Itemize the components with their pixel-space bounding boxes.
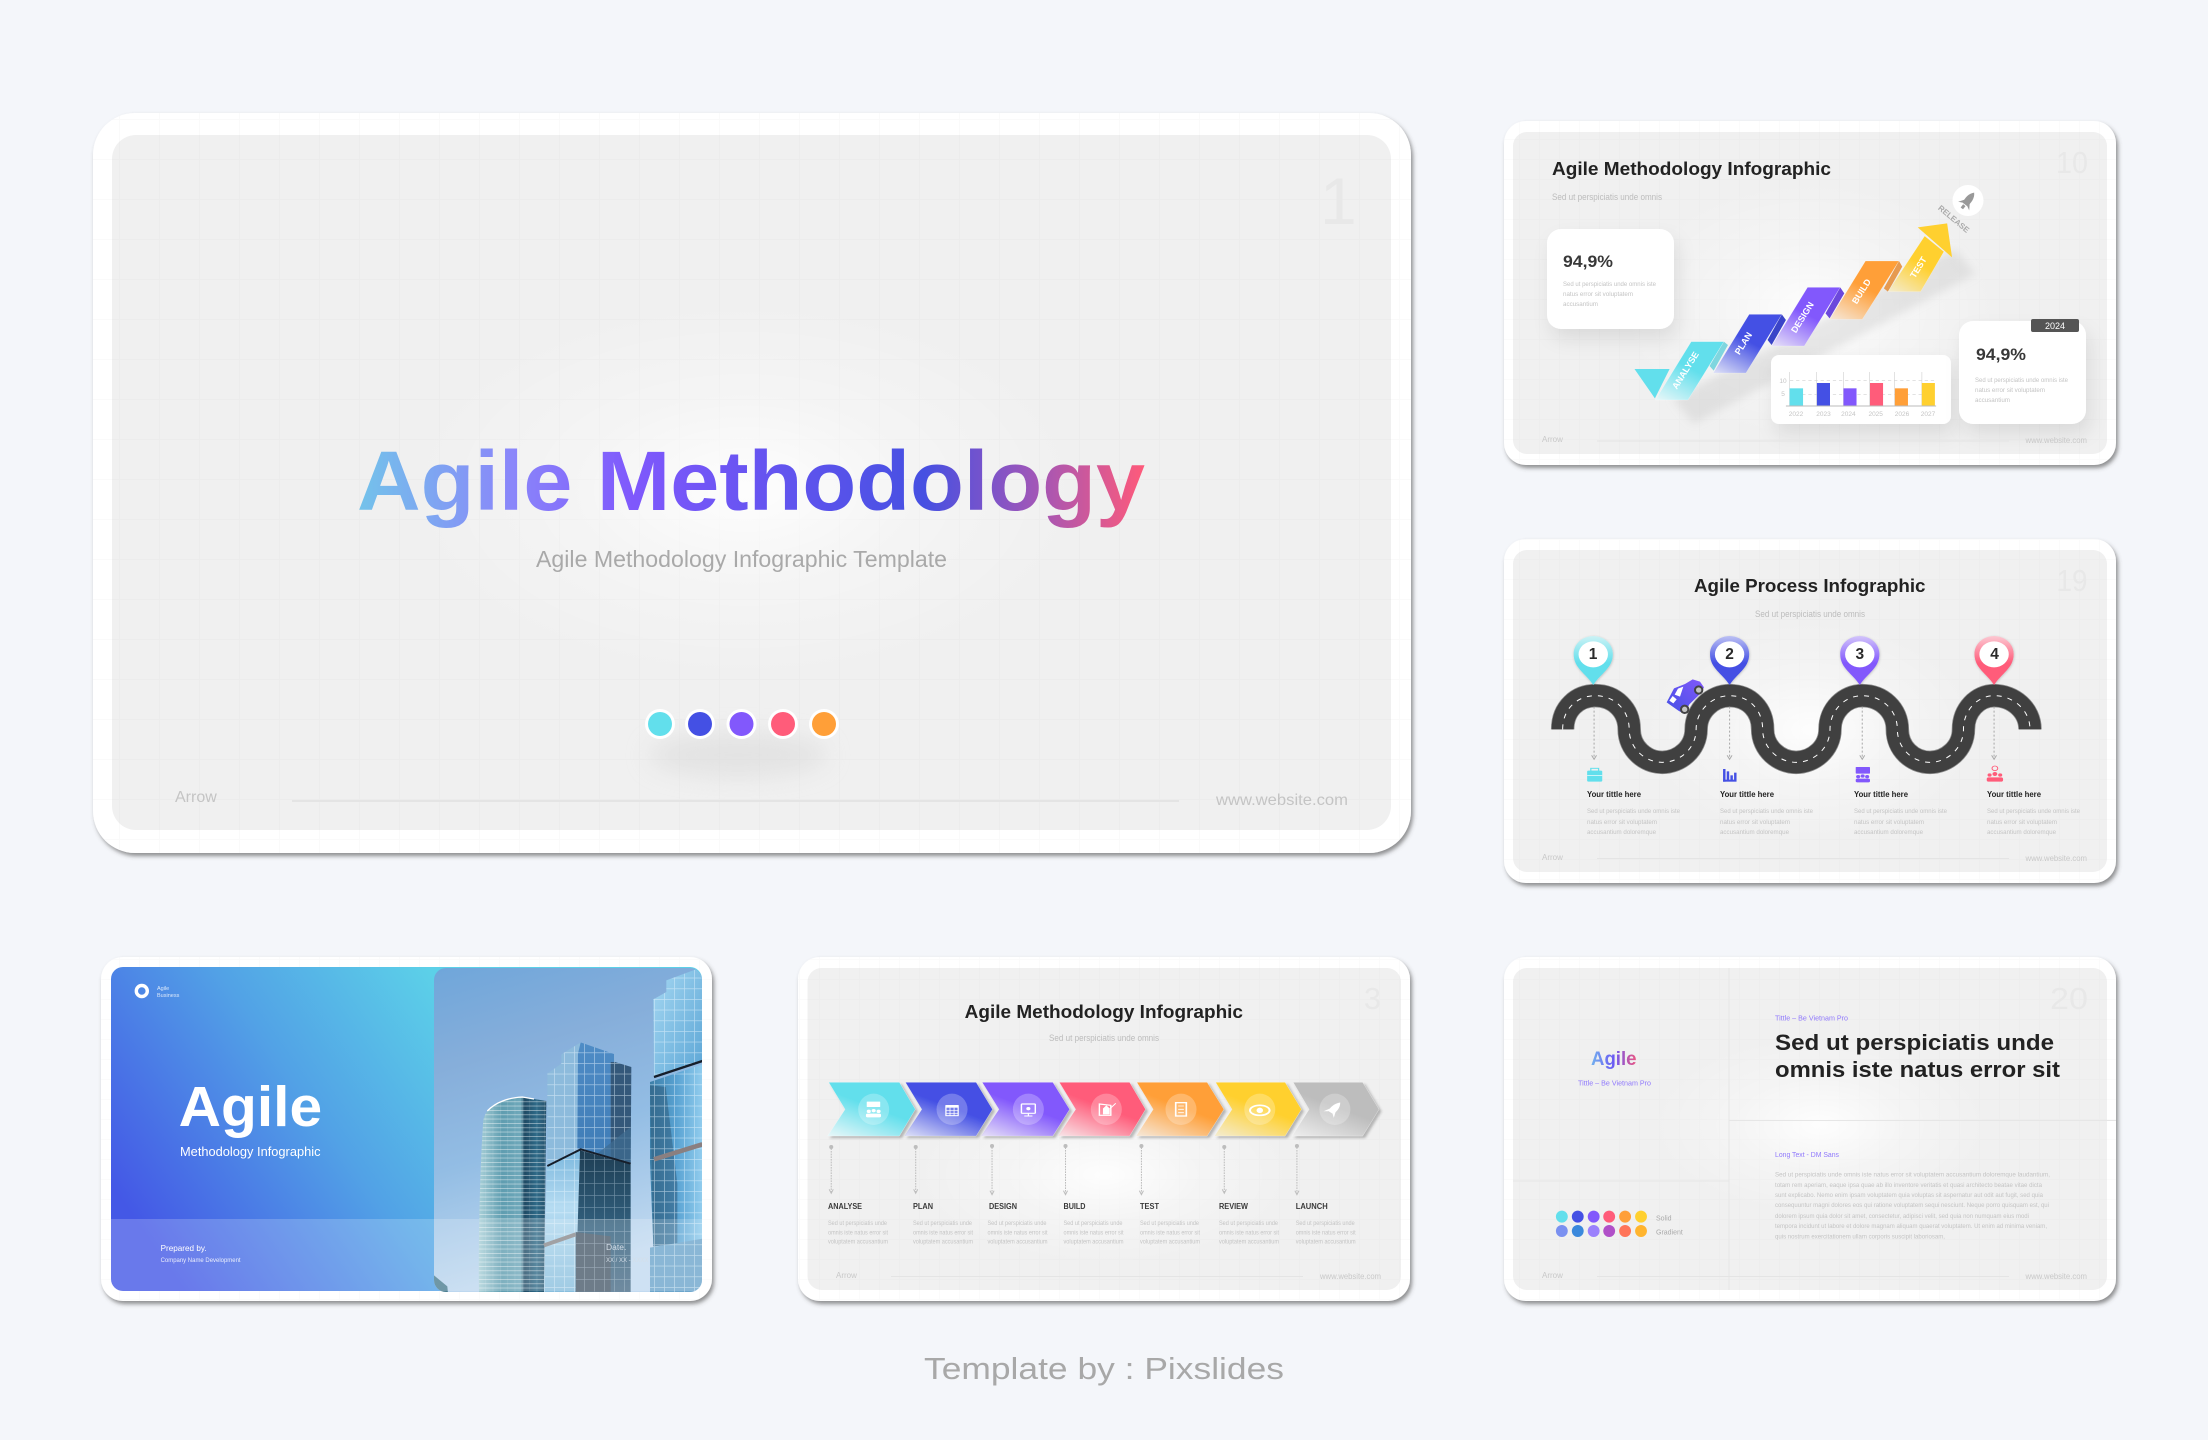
stat card left: 94,9% [1563, 253, 1613, 271]
heading [1775, 1030, 2061, 1082]
icon: car [1667, 679, 1704, 714]
step 3 text: accusantium doloremque [1854, 829, 1923, 836]
paragraph: Sed ut perspiciatis unde omnis iste natus error sit voluptatem accusantium doloremque laudantium, [1775, 1171, 2050, 1178]
step 1 text: natus error sit voluptatem [1587, 819, 1657, 826]
step 1 text: Sed ut perspiciatis unde omnis iste [1587, 808, 1680, 815]
colour dots [645, 709, 839, 777]
bar chart: 2022 [1789, 411, 1804, 418]
year badge: 2024 [2045, 321, 2065, 331]
step: design [988, 1202, 1048, 1246]
panel: main title slide [93, 113, 1411, 853]
pin numbers [1589, 646, 1999, 663]
chevron: launch [1292, 1082, 1379, 1136]
palette swatches: Gradient [1656, 1230, 1683, 1237]
tower: centre [544, 1042, 631, 1294]
tower: right [650, 967, 702, 1294]
paragraph: sunt explicabo. Nemo enim ipsam voluptatem quia voluptas sit aspernatur aut odit aut fugit, sed quia [1775, 1192, 2043, 1199]
road [1563, 696, 2030, 762]
chevron: test [1136, 1082, 1224, 1136]
step 4 text: accusantium doloremque [1987, 829, 2056, 836]
segment: build [1830, 261, 1902, 319]
step: build: voluptatem accusantium [1064, 1240, 1124, 1246]
ribbon labels: ANALYSE [1670, 350, 1701, 391]
bar chart: 2025 [1868, 411, 1883, 418]
pointer arrows [829, 1144, 1299, 1195]
stat card left: Sed ut perspiciatis unde omnis iste [1563, 281, 1656, 288]
step 3 text [1854, 789, 1947, 836]
step icons [1587, 766, 2003, 782]
bar chart: 2026 [1895, 411, 1910, 418]
palette swatches [1556, 1211, 1683, 1237]
palette swatches: Solid [1656, 1216, 1672, 1223]
step: review: omnis iste natus error sit [1219, 1231, 1279, 1237]
pin numbers: 4 [1990, 646, 1999, 663]
step 1 text [1587, 789, 1680, 836]
panel: slide 3 chevron process [798, 957, 1410, 1301]
panel: slide 10 staircase arrow [1504, 121, 2116, 465]
date: XX / XX - XXXX [606, 1258, 648, 1264]
subheading: Sed ut perspiciatis unde omnis [1049, 1033, 1159, 1043]
chevron: analyse [828, 1082, 915, 1136]
brand word: Agile [1591, 1049, 1636, 1070]
credit line: Template by : Pixslides [924, 1351, 1284, 1386]
step: launch: Sed ut perspiciatis unde [1296, 1221, 1355, 1227]
logo: Business [157, 993, 180, 999]
stat card right [1959, 319, 2086, 424]
step: design: Sed ut perspiciatis unde [988, 1221, 1047, 1227]
step: analyse: ANALYSE [828, 1202, 863, 1211]
step 4 text: Sed ut perspiciatis unde omnis iste [1987, 808, 2080, 815]
step: test: voluptatem accusantium [1140, 1240, 1200, 1246]
step 4 text [1987, 789, 2080, 836]
photo: glass towers [434, 967, 702, 1294]
paragraph: quis nostrum exercitationem ullam corporis suscipit laboriosam, [1775, 1234, 1945, 1241]
tower: round [479, 1097, 546, 1294]
ribbon labels: BUILD [1850, 277, 1873, 306]
step: test: Sed ut perspiciatis unde [1140, 1221, 1200, 1227]
step: build: Sed ut perspiciatis unde [1064, 1221, 1123, 1227]
bottom band [111, 1219, 702, 1291]
ribbon labels [1670, 255, 1929, 391]
footer: Arrow [175, 789, 217, 806]
icon: bar report [1723, 769, 1737, 782]
paragraph: consequuntur magni dolores eos qui ratione voluptatem sequi nesciunt. Neque porro quisquam est, qui [1775, 1202, 2049, 1209]
step: review: Sed ut perspiciatis unde [1219, 1221, 1279, 1227]
segment: design [1772, 287, 1844, 346]
step: plan: Sed ut perspiciatis unde [913, 1221, 973, 1227]
brand word: Tittle – Be Vietnam Pro [1578, 1081, 1651, 1088]
step: plan: voluptatem accusantium [913, 1240, 973, 1246]
slide number: 3 [1364, 981, 1381, 1016]
ribbon labels: TEST [1908, 255, 1929, 280]
step: design: voluptatem accusantium [988, 1240, 1048, 1246]
step 2 text: natus error sit voluptatem [1720, 819, 1790, 826]
release label: RELEASE [1936, 203, 1971, 235]
stat card left [1547, 229, 1674, 329]
step: design: omnis iste natus error sit [988, 1231, 1048, 1237]
icon: briefcase [1587, 768, 1602, 782]
slide number: 1 [1320, 164, 1357, 238]
panel: cover slide [101, 957, 712, 1301]
step: analyse: voluptatem accusantium [828, 1240, 888, 1246]
segment: test arrow [1888, 223, 1952, 292]
footer [836, 1271, 1381, 1281]
step: review: voluptatem accusantium [1219, 1240, 1279, 1246]
bar chart: 5 [1781, 391, 1785, 398]
step: design: DESIGN [989, 1202, 1017, 1211]
prepared by: Prepared by. [161, 1243, 207, 1253]
step 1 text: accusantium doloremque [1587, 829, 1656, 836]
step: review: REVIEW [1219, 1202, 1248, 1211]
step: analyse: Sed ut perspiciatis unde [828, 1221, 888, 1227]
chevron: design [981, 1082, 1070, 1136]
chevron: build [1058, 1082, 1146, 1136]
slide number: 10 [2056, 145, 2088, 180]
heading: omnis iste natus error sit [1775, 1057, 2061, 1082]
pin numbers: 3 [1855, 646, 1864, 663]
heading: Agile Process Infographic [1694, 575, 1926, 596]
ribbon labels: PLAN [1733, 330, 1754, 356]
subheading: Sed ut perspiciatis unde omnis [1552, 192, 1662, 202]
step 4 text: natus error sit voluptatem [1987, 819, 2057, 826]
font label: Tittle – Be Vietnam Pro [1775, 1016, 1848, 1023]
bar chart: 2023 [1816, 411, 1831, 418]
paragraph: totam rem aperiam, eaque ipsa quae ab illo inventore veritatis et quasi architecto beatae vitae dicta [1775, 1182, 2042, 1189]
drop lines [1592, 707, 1997, 759]
chevron: plan [904, 1082, 992, 1136]
step: review [1219, 1202, 1279, 1246]
stat card right: Sed ut perspiciatis unde omnis iste [1975, 377, 2068, 384]
step 3 text: Your tittle here [1854, 789, 1908, 799]
step: launch: voluptatem accusantium [1296, 1240, 1356, 1246]
step: analyse: omnis iste natus error sit [828, 1231, 888, 1237]
step 2 text: Your tittle here [1720, 789, 1774, 799]
stat card right: natus error sit voluptatem [1975, 387, 2045, 394]
logo [136, 986, 180, 999]
step 3 text: Sed ut perspiciatis unde omnis iste [1854, 808, 1947, 815]
date [606, 1242, 648, 1264]
step: launch: omnis iste natus error sit [1296, 1231, 1356, 1237]
step 2 text: accusantium doloremque [1720, 829, 1789, 836]
step: analyse [828, 1202, 888, 1246]
bar chart: 2027 [1921, 411, 1936, 418]
step 4 text: Your tittle here [1987, 789, 2041, 799]
ribbon arrow [1634, 223, 1965, 411]
subheading: Sed ut perspiciatis unde omnis [1755, 609, 1865, 619]
bar chart: 2024 [1841, 411, 1856, 418]
step 1 text: Your tittle here [1587, 789, 1641, 799]
segment: analyse [1634, 342, 1728, 400]
paragraph [1775, 1171, 2050, 1241]
step: plan: PLAN [913, 1202, 933, 1211]
prepared by [161, 1243, 241, 1264]
footer: www.website.com [1215, 792, 1348, 809]
step: test: omnis iste natus error sit [1140, 1231, 1200, 1237]
footer [1542, 435, 2087, 445]
main title: Agile Methodology [357, 434, 1145, 528]
location pins [1574, 636, 2014, 685]
date: Date. [606, 1242, 626, 1252]
stat card left: accusantium [1563, 301, 1598, 308]
prepared by: Company Name Development [161, 1258, 241, 1264]
logo: Agile [157, 986, 169, 992]
heading: Agile Methodology Infographic [965, 1001, 1243, 1022]
step: build: BUILD [1064, 1202, 1086, 1211]
footer: Arrow [1542, 1271, 1563, 1280]
heading: Sed ut perspiciatis unde [1775, 1030, 2054, 1055]
footer: Arrow [836, 1271, 857, 1280]
step: build [1064, 1202, 1124, 1246]
long text label: Long Text - DM Sans [1775, 1152, 1839, 1159]
step: test: TEST [1140, 1202, 1159, 1211]
slide number: 20 [2050, 981, 2088, 1016]
panel: slide 19 road process [1504, 539, 2116, 883]
footer: Arrow [1542, 853, 1563, 862]
step 3 text: natus error sit voluptatem [1854, 819, 1924, 826]
stat card right: 94,9% [1976, 346, 2026, 364]
step: launch: LAUNCH [1296, 1202, 1328, 1211]
brand word [1578, 1049, 1651, 1088]
slide number: 19 [2056, 563, 2088, 598]
bar chart [1771, 355, 1951, 424]
chevron: review [1214, 1082, 1301, 1136]
segment: plan [1713, 314, 1786, 373]
step: build: omnis iste natus error sit [1064, 1231, 1124, 1237]
heading: Agile Methodology Infographic [1552, 158, 1831, 179]
step: plan: omnis iste natus error sit [913, 1231, 973, 1237]
step 2 text [1720, 789, 1813, 836]
step: launch [1296, 1202, 1356, 1246]
pin numbers: 2 [1725, 646, 1734, 663]
stat card left: natus error sit voluptatem [1563, 291, 1633, 298]
pin numbers: 1 [1589, 646, 1598, 663]
panel: slide 20 style guide [1504, 957, 2116, 1301]
footer: www.website.com [2025, 854, 2087, 863]
stat card right: accusantium [1975, 397, 2010, 404]
icon: rocket [1952, 185, 1984, 216]
icon: presentation [1856, 767, 1870, 782]
bar chart: 10 [1779, 378, 1787, 385]
subtitle: Agile Methodology Infographic Template [536, 546, 947, 572]
ribbon labels: DESIGN [1789, 300, 1816, 335]
icon: team pin [1987, 766, 2003, 782]
footer [1542, 853, 2087, 863]
step: test [1140, 1202, 1200, 1246]
cover subtitle: Methodology Infographic [180, 1144, 321, 1159]
chevrons [828, 1082, 1379, 1136]
footer [175, 789, 1348, 809]
footer: www.website.com [2025, 436, 2087, 445]
step 2 text: Sed ut perspiciatis unde omnis iste [1720, 808, 1813, 815]
step: plan [913, 1202, 973, 1246]
paragraph: tempora incidunt ut labore et dolore magnam aliquam quaerat voluptatem. Ut enim ad minima veniam, [1775, 1223, 2047, 1230]
cover title: Agile [179, 1075, 322, 1139]
footer [1542, 1271, 2087, 1281]
paragraph: dolorem ipsum quia dolor sit amet, consectetur, adipisci velit, sed quia non numquam eius modi [1775, 1213, 2029, 1220]
footer: Arrow [1542, 435, 1563, 444]
footer: www.website.com [1319, 1272, 1381, 1281]
footer: www.website.com [2025, 1272, 2087, 1281]
